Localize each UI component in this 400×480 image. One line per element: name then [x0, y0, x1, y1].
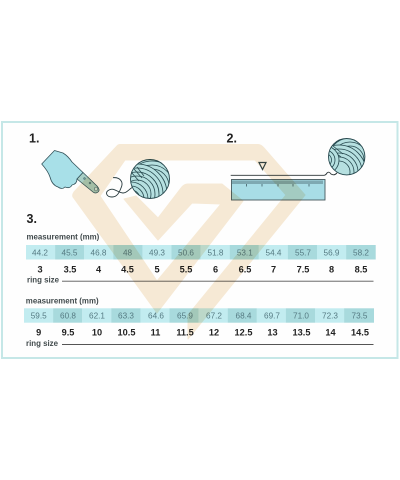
table 1: measurement cells: 55.7: [295, 248, 311, 257]
table 2: measurement cells: 65.9: [177, 312, 193, 320]
table 1: measurement cells: 46.8: [91, 248, 107, 257]
table 1: ring sizes: 3: [37, 264, 43, 274]
table 2: measurement cells: 71.0: [293, 312, 309, 320]
table 2: measurement cells: 62.1: [89, 312, 105, 320]
table 1: ring sizes: 6: [213, 264, 218, 274]
table 2: ring sizes: 13: [267, 327, 278, 337]
table 2: ring sizes: 10: [92, 327, 102, 337]
table 1: ring sizes: 8.5: [355, 264, 367, 274]
table 1: ring sizes: 7: [271, 264, 276, 274]
step 1 number: 1.: [29, 132, 39, 146]
table 2: ring sizes: 11: [151, 327, 160, 337]
watermark: diamond outline: [73, 144, 305, 339]
table 2: ring size label: ring size: [26, 339, 59, 348]
table 1: measurement cells: 58.2: [353, 248, 369, 257]
table 2: measurement cells: 69.7: [264, 312, 280, 320]
table 1: measurement cells: 50.6: [178, 248, 194, 257]
table 1: measurement cells: 54.4: [266, 248, 282, 257]
table 2: measurement cells: 60.8: [60, 312, 76, 320]
table 1: ring sizes: 8: [329, 264, 334, 274]
table 1 label: measurement (mm): [26, 233, 100, 242]
table 2 label: measurement (mm): [26, 296, 99, 305]
thread line: [231, 172, 337, 175]
table 1: measurement cells: 56.9: [324, 248, 340, 257]
table 2: measurement cells: 72.3: [322, 312, 338, 320]
table 2: measurement cells: [24, 308, 374, 323]
table 2: measurement cells: 64.6: [148, 312, 164, 320]
table 1: measurement cells: 45.5: [62, 248, 78, 257]
icon: ruler: [232, 180, 325, 200]
table 2: ring sizes: [36, 327, 369, 337]
icon: yarn ball 1 with thread: [106, 159, 170, 199]
table 2: measurement cells: 63.3: [118, 312, 134, 320]
panel: card frame: [2, 122, 398, 358]
table 2: measurement cells: 67.2: [206, 312, 222, 320]
table 1: ring sizes: 7.5: [297, 264, 309, 274]
table 2: ring sizes: 10.5: [118, 327, 135, 337]
table 2: ring sizes: 12.5: [235, 327, 252, 337]
table 1: ring sizes: [37, 264, 367, 274]
table 1: ring sizes: 4: [96, 264, 102, 274]
table 1: ring sizes: 4.5: [121, 264, 134, 274]
table 2: ring sizes: 11.5: [176, 327, 194, 337]
table 2: measurement cells: 59.5: [31, 312, 47, 320]
table 1: measurement cells: 49.3: [149, 248, 165, 257]
table 2: ring sizes: 14.5: [351, 327, 369, 337]
table 1: ring sizes: 3.5: [64, 264, 76, 274]
table 2: ring sizes: 12: [209, 327, 219, 337]
table 2: ring sizes: 14: [325, 327, 336, 337]
table 1: measurement cells: 51.8: [208, 248, 224, 257]
table 1: ring sizes: 5: [154, 264, 160, 274]
icon: hand with pointing finger: [42, 150, 99, 193]
step 3 number: 3.: [26, 212, 37, 226]
step 2 number: 2.: [226, 132, 237, 146]
table 1: ring sizes: 5.5: [180, 264, 192, 274]
table 2: ring sizes: 13.5: [293, 327, 310, 337]
table 2: ring sizes: 9.5: [62, 327, 74, 337]
table 1: ring sizes: 6.5: [239, 264, 251, 274]
table 2: measurement cells: 68.4: [236, 312, 252, 320]
table 1: measurement cells: 48: [123, 248, 132, 257]
table 1: measurement cells: [26, 245, 376, 260]
table 2: ring sizes: 9: [36, 327, 41, 337]
table 1: measurement cells: 53.1: [237, 248, 253, 257]
icon: triangle marker: [259, 162, 266, 170]
table 1: measurement cells: 44.2: [32, 248, 48, 257]
table 2: measurement cells: 73.5: [352, 312, 368, 320]
icon: yarn ball 2: [328, 138, 366, 176]
table 1: ring size label: ring size: [27, 276, 60, 284]
